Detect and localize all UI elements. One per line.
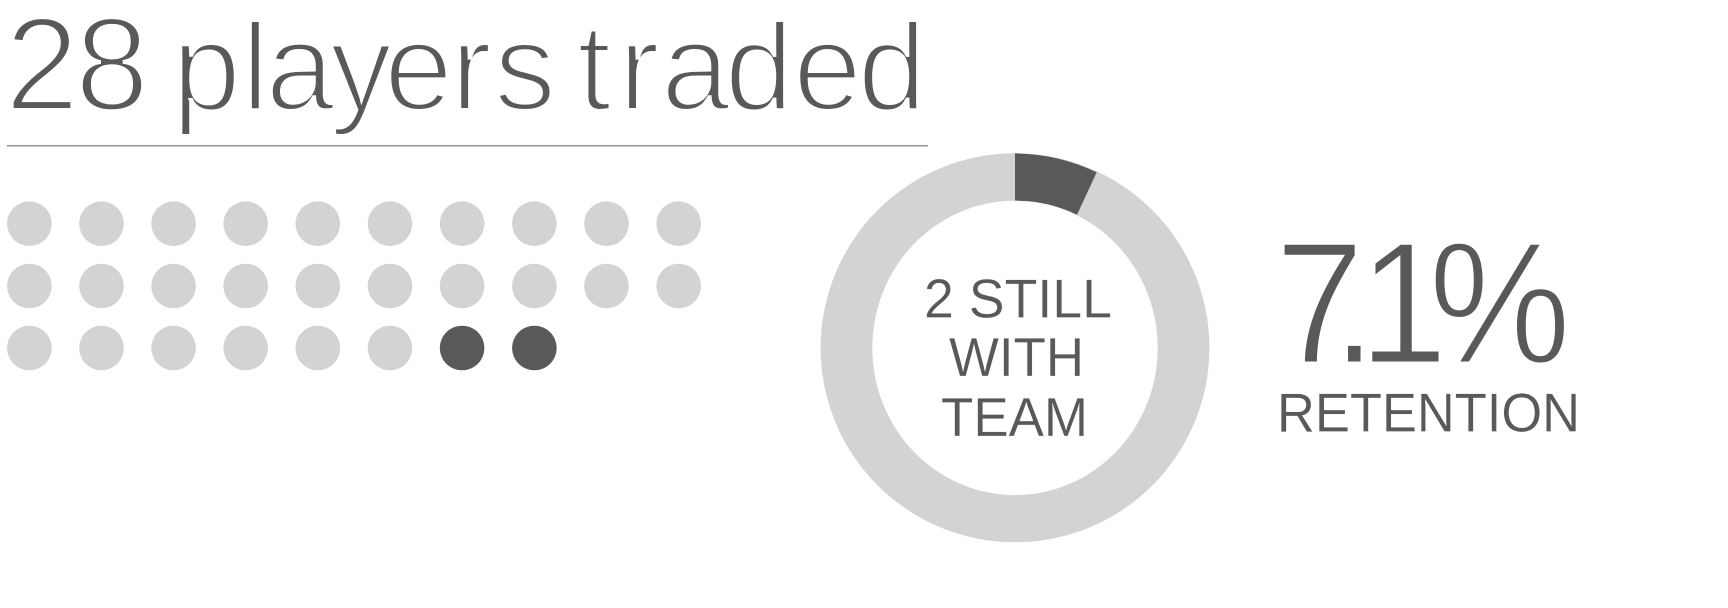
donut chart bbox=[821, 153, 1209, 542]
donut centre label: WITH bbox=[949, 326, 1084, 388]
title underline bbox=[7, 145, 928, 146]
donut hole bbox=[872, 201, 1158, 495]
donut highlighted wedge bbox=[1015, 153, 1097, 215]
row 1 dots bbox=[7, 201, 701, 246]
donut centre label: TEAM bbox=[941, 386, 1088, 448]
row 2 dots bbox=[7, 264, 701, 308]
title: traded bbox=[577, 0, 926, 137]
donut centre label bbox=[924, 268, 1112, 448]
donut outer ring bbox=[821, 153, 1209, 542]
retention percentage: 7.1% bbox=[1275, 207, 1571, 400]
retention label: RETENTION bbox=[1277, 382, 1580, 444]
dot grid: 28 players traded, 2 highlighted bbox=[7, 201, 701, 370]
row 3 dots, gray bbox=[7, 326, 412, 370]
title: players bbox=[172, 0, 594, 137]
donut centre label: 2 STILL bbox=[924, 268, 1112, 330]
row 3 dots, dark: players still with team bbox=[440, 326, 557, 370]
